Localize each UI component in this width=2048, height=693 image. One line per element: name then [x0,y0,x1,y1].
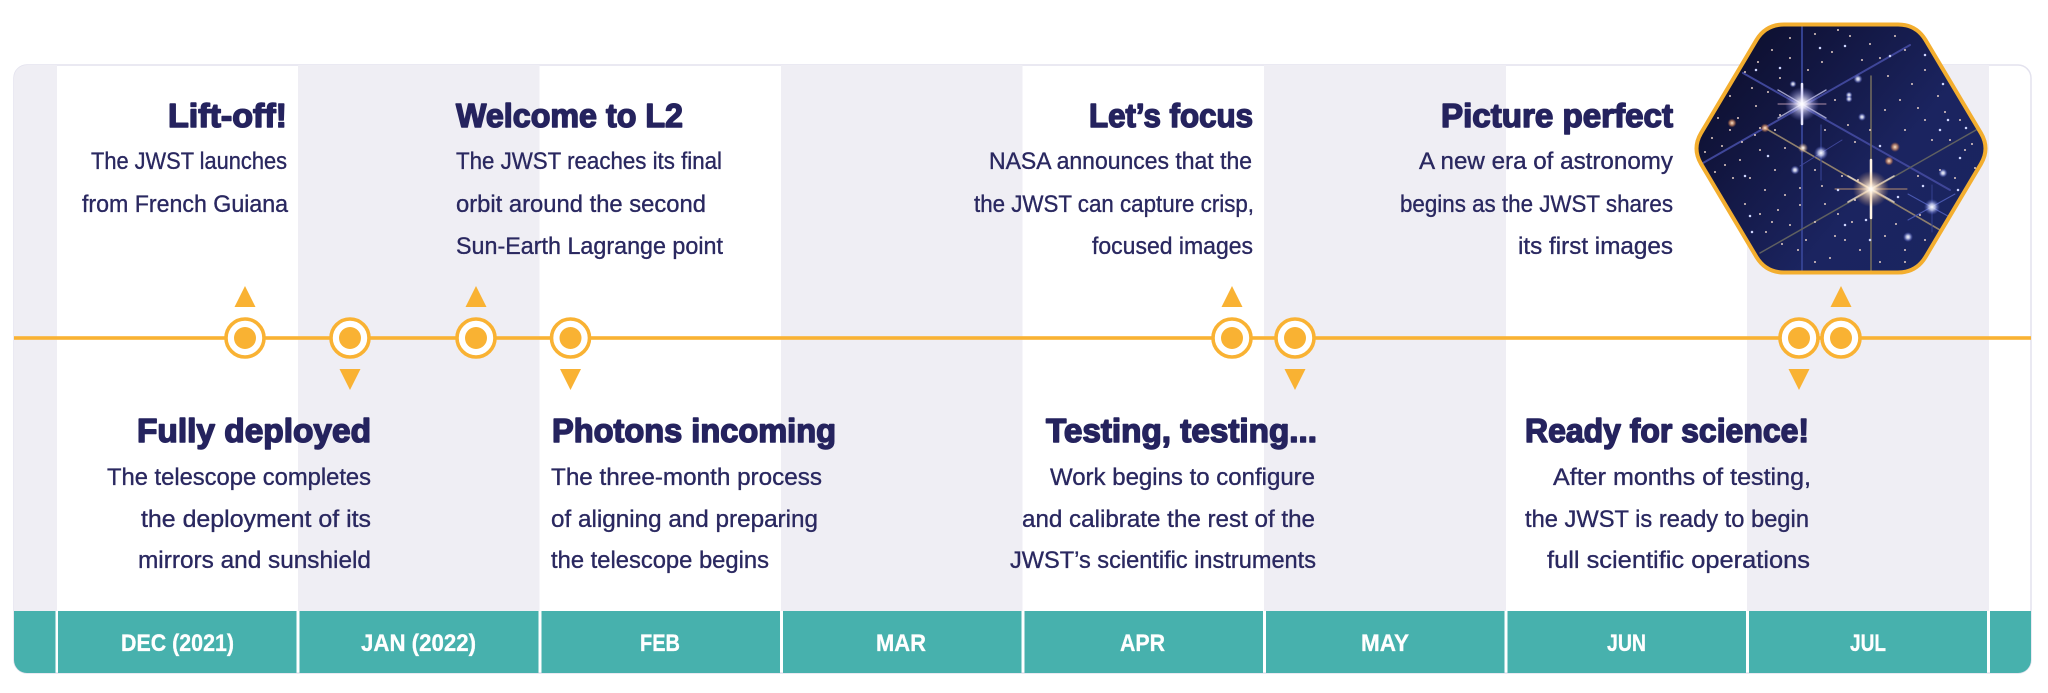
marker: photons incoming [552,319,590,390]
description: the JWST can capture crisp, [974,191,1254,218]
description: full scientific operations [1547,547,1810,574]
background stars, blue [1745,46,1966,240]
description: The JWST launches [91,148,287,175]
event: Picture perfect [1400,97,1673,260]
heading: Let’s focus [1089,97,1253,134]
description [1400,148,1673,260]
marker: fully deployed [331,319,369,390]
description: NASA announces that the [989,148,1252,175]
description: JWST’s scientific instruments [1010,547,1316,574]
month bar: MAR [876,630,926,657]
month bar: JUN [1607,630,1646,657]
marker: lift-off [226,286,264,357]
diffraction spikes [1703,24,1976,272]
description: focused images [1092,233,1253,260]
timeline markers [226,286,1860,390]
marker: welcome to L2 [457,286,495,357]
hexagon outline [1696,24,1986,272]
month bar: MAY [1361,630,1409,657]
month bar [14,611,2031,673]
background stars, warm [1705,30,1975,262]
marker: ready for science [1780,319,1818,390]
heading: Testing, testing... [1046,412,1317,449]
heading: Picture perfect [1441,97,1673,134]
description [82,148,289,218]
timeline line [14,336,2031,340]
month bar: JUL [1850,630,1886,657]
description: A new era of astronomy [1419,148,1673,175]
description: After months of testing, [1553,464,1811,491]
heading: Welcome to L2 [456,97,683,134]
description: the JWST is ready to begin [1525,506,1809,533]
event: Lift-off! [82,97,289,218]
description: the telescope begins [551,547,769,574]
event: Fully deployed [107,412,371,574]
description [974,148,1254,260]
heading: Fully deployed [137,412,371,449]
month bar: APR [1120,630,1165,657]
description [456,148,723,260]
heading: Ready for science! [1525,412,1809,449]
event: Photons incoming [551,412,836,574]
description: from French Guiana [82,191,289,218]
description: The telescope completes [107,464,371,491]
description [551,464,822,574]
event: Welcome to L2 [456,97,723,260]
description: and calibrate the rest of the [1022,506,1315,533]
description: of aligning and preparing [551,506,818,533]
description [1010,464,1316,574]
month bar: DEC (2021) [121,630,234,657]
month bar: JAN (2022) [361,630,476,657]
event: Ready for science! [1525,412,1811,574]
description: orbit around the second [456,191,706,218]
description: the deployment of its [141,506,371,533]
heading: Lift-off! [168,97,287,134]
description: its first images [1518,233,1673,260]
event: Let's focus [974,97,1254,260]
event: Testing, testing... [1010,412,1317,574]
marker: picture perfect [1822,286,1860,357]
description: The three-month process [551,464,822,491]
image: hexagonal JWST star field [1685,18,1997,280]
description [107,464,371,574]
description: The JWST reaches its final [456,148,722,175]
marker: let's focus [1213,286,1251,357]
bright stars [1786,88,1818,120]
month bar: FEB [640,630,680,657]
description: Sun-Earth Lagrange point [456,233,723,260]
description: Work begins to configure [1050,464,1315,491]
description [1525,464,1811,574]
heading: Photons incoming [552,412,836,449]
marker: testing [1276,319,1314,390]
description: begins as the JWST shares [1400,191,1673,218]
description: mirrors and sunshield [138,547,371,574]
alternating month bands [14,65,1989,611]
